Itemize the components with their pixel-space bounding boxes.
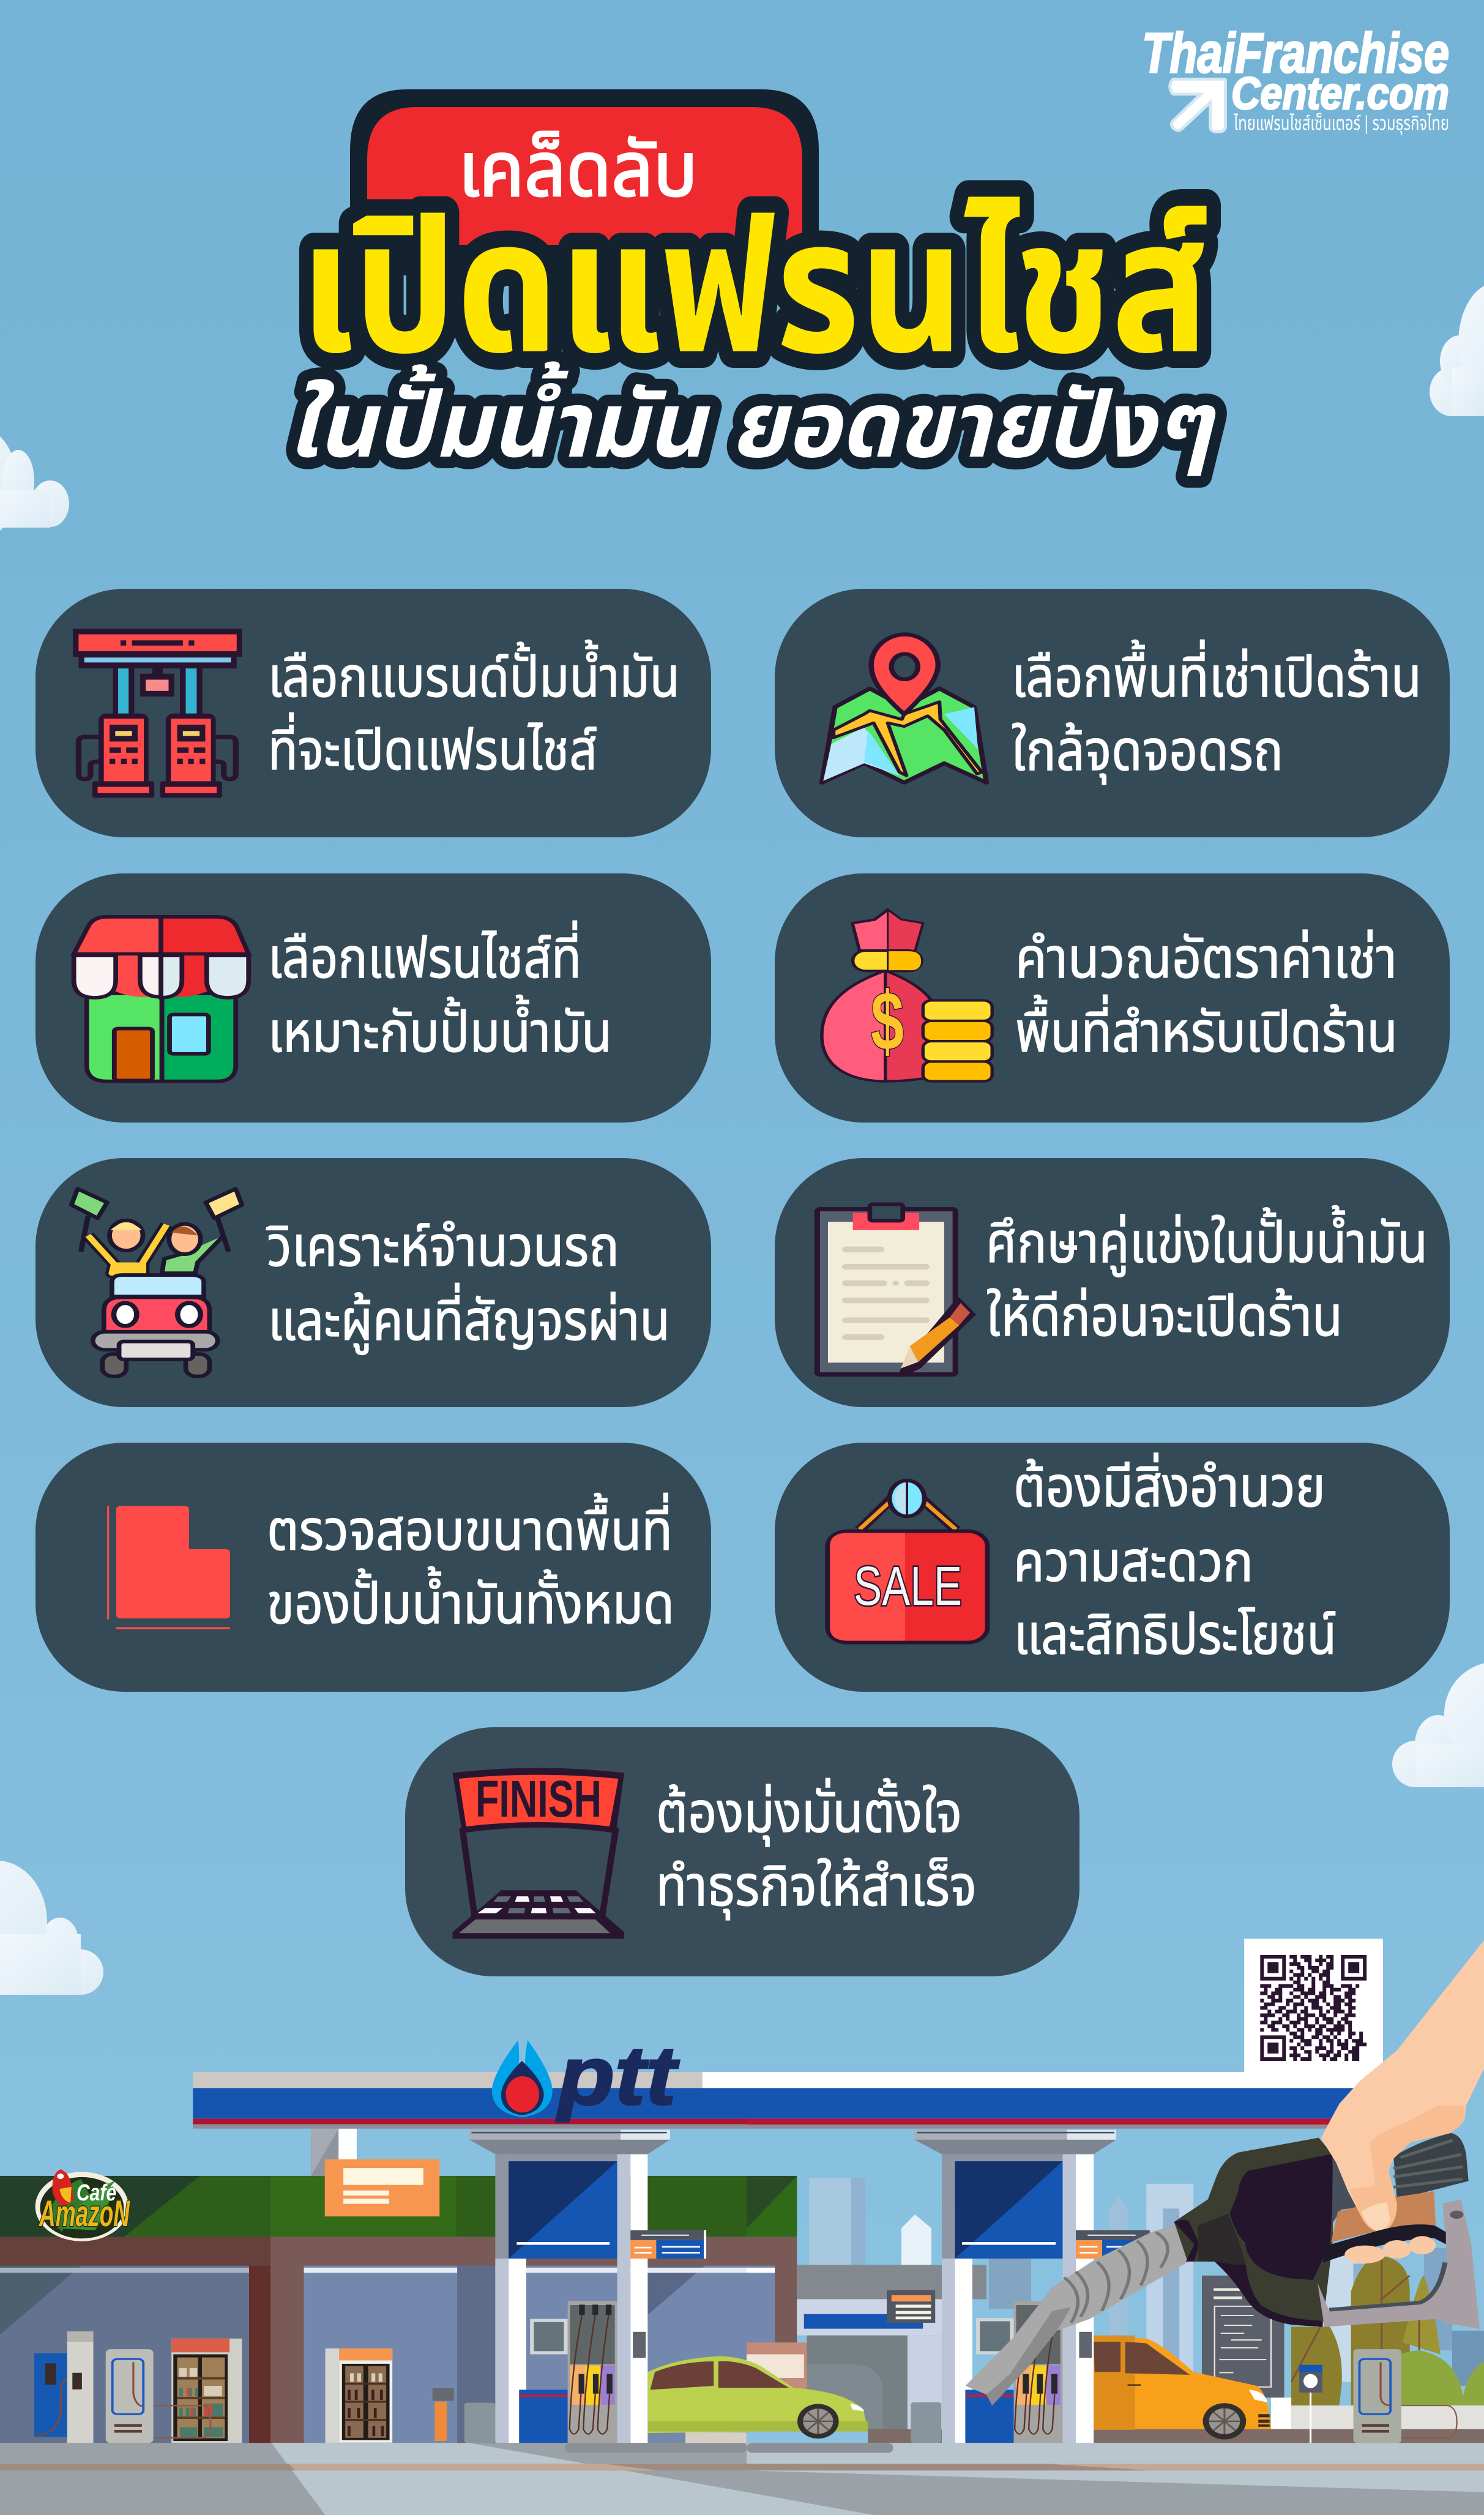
nozzle shell — [1174, 2138, 1333, 2327]
panel: study competitors — [775, 1158, 1450, 1407]
scene: right part (skyline, pumps, cars) — [648, 1939, 1484, 2515]
panel: commitment — [405, 1727, 1079, 1976]
nozzle body dark — [1230, 2154, 1333, 2280]
text line 2: พื้นที่สำหรับเปิดร้าน — [1015, 995, 1398, 1064]
scene: left part (canopy, store, pumps) — [0, 2072, 747, 2515]
text line 2: ใกล้จุดจอดรถ — [1012, 720, 1283, 785]
pump island 2 — [914, 2130, 1150, 2443]
pump island 1 — [469, 2130, 706, 2443]
city skyline — [809, 2178, 1484, 2386]
ground — [747, 2443, 1484, 2515]
text line 1: เลือกแฟรนไชส์ที่ — [268, 921, 581, 990]
icon: car with people — [72, 1189, 242, 1377]
icon: sale sign — [827, 1481, 988, 1643]
ptt wordmark: ptt — [556, 2029, 679, 2122]
nozzle neck dark — [1198, 2214, 1246, 2265]
text line 1: ตรวจสอบขนาดพื้นที่ — [267, 1493, 673, 1562]
store facade — [0, 2176, 747, 2443]
icon: gas station — [73, 629, 242, 798]
title: เคล็ดลับ: เคล็ดลับ — [458, 128, 698, 212]
trigger guard — [1322, 2224, 1446, 2263]
finish text: FINISH — [475, 1770, 602, 1828]
cloud: top right — [1430, 283, 1484, 416]
text line 1: ต้องมุ่งมั่นตั้งใจ — [656, 1778, 962, 1847]
text line 2: ที่จะเปิดแฟรนไชส์ — [268, 712, 597, 782]
icon: floor plan — [107, 1506, 230, 1629]
dollar sign: $ — [871, 974, 904, 1067]
canopy support and orange sign — [311, 2129, 439, 2216]
title red tab — [350, 89, 819, 275]
text line 2: เหมาะกับปั้มน้ำมัน — [268, 995, 612, 1064]
text line 1: ศึกษาคู่แข่งในปั้มน้ำมัน — [986, 1205, 1428, 1277]
hand — [1321, 1940, 1484, 2232]
text line 1: วิเคราะห์จำนวนรถ — [266, 1216, 619, 1278]
trigger plate — [1331, 2191, 1436, 2242]
icon: map pin — [822, 634, 986, 783]
text line 1: ต้องมีสิ่งอำนวย — [1013, 1452, 1326, 1519]
logo: PTT — [492, 2029, 679, 2122]
frame bolt — [1450, 2211, 1463, 2219]
logo: ThaiFranchise Center — [1142, 22, 1449, 135]
vending machines in store — [34, 2331, 495, 2443]
sale text: SALE — [854, 1556, 962, 1617]
handle frame — [1318, 2199, 1480, 2329]
text line 1: เลือกแบรนด์ปั้มน้ำมัน — [268, 640, 680, 709]
fuel nozzle spout — [965, 2222, 1191, 2405]
ground — [0, 2443, 747, 2515]
title block — [288, 89, 1216, 476]
QR code — [1244, 1939, 1383, 2072]
text line 2: ของปั้มน้ำมันทั้งหมด — [267, 1566, 674, 1635]
text line 2: ให้ดีก่อนจะเปิดร้าน — [986, 1285, 1343, 1348]
icon: clipboard and pencil — [817, 1204, 976, 1377]
small station building — [797, 2265, 986, 2443]
panel: choose brand — [35, 589, 711, 837]
logo wordmark line 2: Center.com — [1231, 68, 1449, 119]
panel: facilities — [775, 1443, 1450, 1692]
logo text: Amazon: AmazoN — [39, 2193, 130, 2234]
logo arrow — [1171, 81, 1224, 130]
text line 2: และผู้คนที่สัญจรผ่าน — [268, 1283, 670, 1355]
cloud: lower right — [1392, 1662, 1484, 1787]
panel: check area size — [35, 1443, 711, 1692]
title: เปิดแฟรนไชส์: เปิดแฟรนไชส์ — [300, 184, 1209, 391]
orange car — [1094, 2336, 1271, 2439]
icon: finish line — [452, 1768, 624, 1939]
billboard and trees — [1094, 2256, 1484, 2443]
icon: shop — [74, 917, 248, 1082]
nozzle grip — [1332, 2133, 1469, 2224]
cloud: upper left — [0, 428, 69, 539]
left building continuation — [747, 2176, 807, 2394]
text line 2: ทำธุรกิจให้สำเร็จ — [656, 1855, 977, 1920]
nozzle neck ring — [1174, 2220, 1199, 2262]
text line 3: และสิทธิประโยชน์ — [1014, 1604, 1337, 1666]
logo: Cafe Amazon — [35, 2169, 129, 2241]
panel: analyze traffic — [35, 1158, 711, 1407]
nozzle lower rim — [1215, 2262, 1322, 2327]
cloud: lower left — [0, 1861, 103, 1995]
fuel nozzle and hand — [1174, 1940, 1484, 2329]
icon: money bag — [822, 910, 992, 1082]
panel: calculate rent — [775, 873, 1450, 1123]
logo text: Cafe: Café — [76, 2180, 116, 2206]
canopy right section — [747, 2072, 1377, 2129]
text line 2: ความสะดวก — [1013, 1531, 1253, 1593]
panel: choose rental area — [775, 589, 1450, 837]
fingers — [1344, 2236, 1436, 2263]
panel: choose franchise — [35, 873, 711, 1123]
green car — [648, 2356, 868, 2443]
text line 1: คำนวณอัตราค่าเช่า — [1015, 927, 1397, 990]
title: ในปั้มน้ำมัน ยอดขายปังๆ: ในปั้มน้ำมัน ยอดขายปังๆ — [288, 361, 1216, 476]
canopy left section — [193, 2072, 747, 2129]
text line 1: เลือกพื้นที่เช่าเปิดร้าน — [1012, 640, 1422, 709]
